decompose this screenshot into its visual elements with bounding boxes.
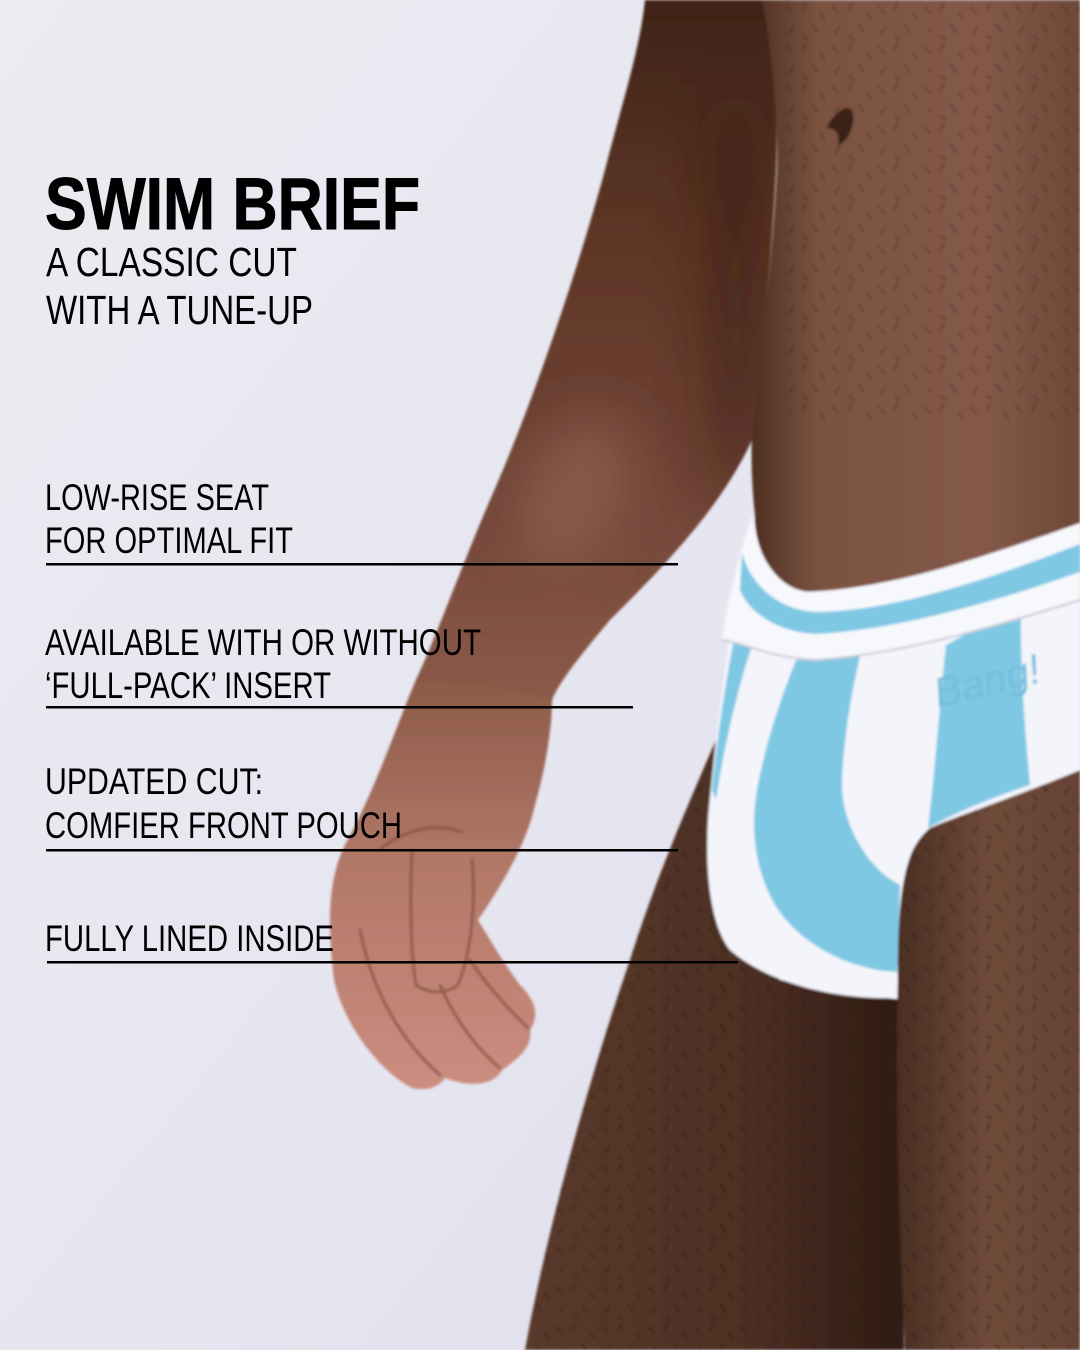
torso hair texture bbox=[780, 0, 1080, 420]
brief blue stripes bbox=[712, 604, 1030, 972]
feature: fully lined: FULLY LINED INSIDE bbox=[45, 918, 334, 959]
subtitle bbox=[46, 239, 313, 333]
feature: full-pack insert: AVAILABLE WITH OR WITHOUT bbox=[45, 622, 481, 663]
subtitle: A CLASSIC CUT bbox=[46, 239, 297, 285]
navel bbox=[826, 108, 853, 146]
title: SWIM BRIEF bbox=[45, 164, 420, 245]
figure photo illustration bbox=[330, 0, 1080, 1350]
feature: full-pack insert bbox=[45, 622, 633, 708]
logo embossed: Bang! bbox=[929, 645, 1045, 717]
right thigh bbox=[897, 765, 1080, 1350]
subtitle: WITH A TUNE-UP bbox=[46, 287, 313, 333]
feature: updated cut: COMFIER FRONT POUCH bbox=[45, 805, 402, 846]
left leg bbox=[525, 740, 904, 1350]
feature: low-rise seat bbox=[45, 477, 678, 566]
forearm light and shadow bbox=[516, 128, 772, 559]
feature: updated cut bbox=[45, 761, 678, 852]
feature: low-rise seat: LOW-RISE SEAT bbox=[45, 477, 269, 518]
upper arm and forearm bbox=[415, 0, 777, 700]
torso bbox=[752, 0, 1080, 592]
hand bbox=[330, 682, 552, 1089]
feature: updated cut: UPDATED CUT: bbox=[45, 761, 263, 802]
finger details bbox=[360, 828, 528, 1075]
feature: full-pack insert: ‘FULL-PACK’ INSERT bbox=[45, 665, 331, 706]
feature: low-rise seat: FOR OPTIMAL FIT bbox=[45, 520, 293, 561]
waistband bbox=[722, 515, 1080, 660]
leg hair texture bbox=[525, 740, 1080, 1350]
brief body bbox=[707, 530, 1080, 998]
